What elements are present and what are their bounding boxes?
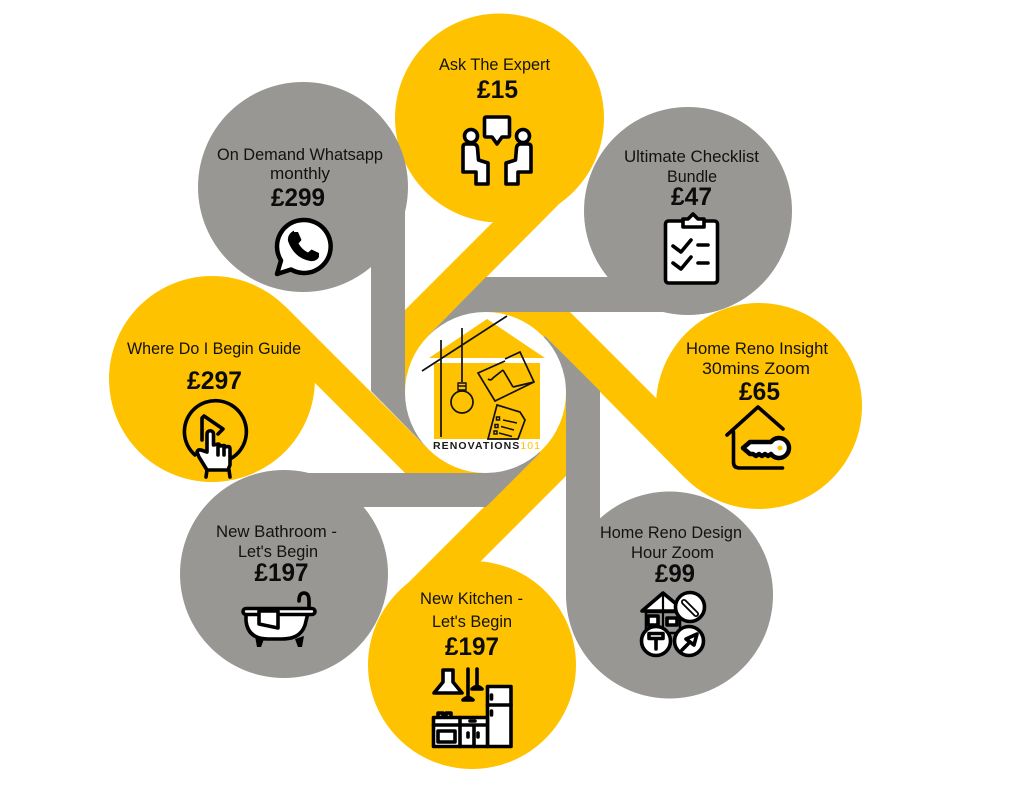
panel: Renovations 101 logo: [405, 312, 566, 473]
heading: On Demand Whatsapp monthly: On Demand Whatsapp: [217, 145, 383, 164]
panel: On Demand Whatsapp monthly: [198, 82, 486, 449]
heading: Home Reno Design Hour Zoom: Hour Zoom: [631, 543, 714, 562]
heading: Home Reno Design Hour Zoom: Home Reno Design: [600, 523, 742, 542]
heading: Ask The Expert: Ask The Expert: [439, 55, 550, 74]
panel: Where Do I Begin Guide: [109, 276, 486, 482]
heading: New Bathroom - Let's Begin: New Bathroom -: [216, 522, 337, 541]
price: £299: £299: [271, 184, 325, 212]
panel: Home Reno Design Hour Zoom: [486, 336, 773, 698]
price: £65: £65: [739, 378, 780, 406]
heading: Home Reno Design Hour Zoom: [600, 523, 742, 562]
logo: wordmark: RENOVATIONS101: [433, 440, 540, 452]
icon: house and tools: [642, 592, 704, 656]
heading: New Bathroom - Let's Begin: [216, 522, 337, 561]
icon: bathtub: [243, 593, 315, 647]
heading: New Kitchen - Let's Begin: [420, 589, 523, 631]
heading: Home Reno Insight 30mins Zoom: Home Reno Insight: [686, 339, 828, 358]
heading: Home Reno Insight 30mins Zoom: 30mins Zoom: [702, 359, 810, 378]
heading: Ultimate Checklist Bundle: [624, 147, 759, 186]
logo: lines and light bulb: [422, 316, 507, 437]
price: £47: £47: [671, 183, 712, 211]
heading: On Demand Whatsapp monthly: [217, 145, 383, 183]
logo: document: [488, 405, 525, 439]
heading: New Bathroom - Let's Begin: Let's Begin: [238, 542, 318, 561]
price: £197: £197: [254, 559, 308, 587]
price: £99: £99: [655, 560, 695, 588]
panel: New Kitchen - Let's Begin: [368, 392, 576, 769]
icon: two people talking: [463, 117, 531, 184]
heading: Ultimate Checklist Bundle: Ultimate Checklist: [624, 147, 759, 166]
icon: kitchen: [434, 669, 511, 746]
icon: play button with pointing hand: [184, 401, 246, 477]
icon: clipboard checklist: [666, 214, 718, 283]
panel: Ultimate Checklist Bundle: [428, 107, 792, 392]
price: £15: £15: [477, 76, 518, 104]
icon: house with key: [727, 407, 789, 468]
heading: Home Reno Insight 30mins Zoom: [686, 339, 828, 378]
panel: Home Reno Insight 30mins Zoom: [486, 303, 862, 509]
panel: Ask The Expert: [395, 14, 604, 392]
price: £197: £197: [445, 633, 499, 661]
heading: New Kitchen - Let's Begin: Let's Begin: [432, 612, 512, 631]
heading: On Demand Whatsapp monthly: monthly: [270, 164, 330, 183]
heading: Ultimate Checklist Bundle: Bundle: [667, 167, 717, 186]
panel: New Bathroom - Let's Begin: [180, 392, 540, 678]
heading: New Kitchen - Let's Begin: New Kitchen -: [420, 589, 523, 608]
price: £297: £297: [187, 367, 242, 395]
heading: Where Do I Begin Guide: Where Do I Begin Guide: [127, 339, 301, 358]
logo: floor plan: [478, 352, 534, 401]
logo: yellow house: [429, 319, 545, 439]
icon: WhatsApp logo: [277, 220, 331, 274]
